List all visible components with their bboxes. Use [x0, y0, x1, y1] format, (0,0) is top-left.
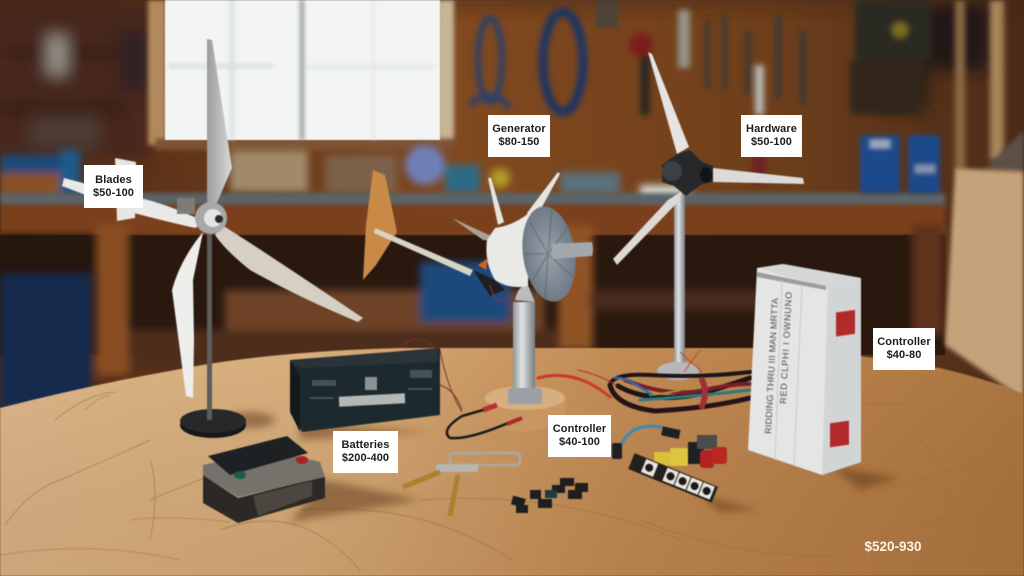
- label: controller cost, centre: [548, 415, 611, 457]
- wiring on generator: [473, 258, 505, 301]
- label: controller cost, centre: $40-100: [559, 436, 600, 448]
- metal mast: [508, 285, 542, 404]
- terminal connectors: [654, 435, 727, 468]
- hub: [177, 198, 227, 234]
- controller printed text: RIDDING THRU III MAN MRTTA: [763, 298, 780, 434]
- label: controller cost, right: $40-80: [887, 349, 921, 361]
- wood base: [485, 386, 566, 431]
- background: pegboard tools: [470, 0, 1004, 185]
- label: blades cost: Blades: [95, 174, 132, 186]
- wire bundle: [538, 370, 750, 411]
- label: batteries cost: [333, 431, 398, 473]
- blades: [62, 39, 363, 398]
- table scratches and grain: [0, 392, 1024, 570]
- label: batteries cost: Batteries: [342, 439, 389, 451]
- label: hardware cost: Hardware: [746, 123, 797, 135]
- cooling fan: [517, 203, 581, 305]
- mast and base: [657, 195, 702, 380]
- black connector pieces: [511, 478, 588, 513]
- alligator clip leads: [447, 405, 522, 438]
- pole and base: [180, 230, 246, 438]
- background: workbench and crates: [0, 135, 945, 410]
- terminal strip: [628, 453, 718, 503]
- round wooden table: [0, 348, 1024, 576]
- tail boom: [374, 228, 473, 276]
- label: hardware cost: [741, 115, 802, 157]
- label: controller cost, centre: Controller: [553, 423, 606, 435]
- centre wind turbine with tail and generator: [363, 170, 593, 431]
- blue jumper cable: [612, 426, 681, 459]
- large black battery: [290, 339, 462, 432]
- generator shaft: [552, 242, 593, 259]
- label: generator cost: [488, 115, 550, 157]
- label: blades cost: $50-100: [93, 186, 134, 198]
- label: generator cost: Generator: [492, 123, 546, 135]
- background: window: [165, 0, 440, 140]
- label: generator cost: $80-150: [498, 136, 540, 148]
- white charge controller box: [748, 264, 861, 475]
- label: controller cost, right: [873, 328, 935, 370]
- wooden tail fin: [363, 170, 397, 280]
- label: hardware cost: $50-100: [751, 136, 792, 148]
- right wind turbine: [613, 52, 804, 380]
- black hub: [662, 150, 713, 196]
- total cost: $520-930: [864, 539, 922, 554]
- left wind turbine: [62, 39, 363, 438]
- hardware: brackets and bolts: [403, 453, 520, 516]
- label: controller cost, right: Controller: [877, 336, 931, 348]
- small rear blades: [452, 172, 560, 243]
- small battery: [203, 436, 325, 523]
- controller printed text: [763, 292, 794, 434]
- label: blades cost: [84, 165, 143, 208]
- shadows on table: [225, 412, 900, 522]
- background: cardboard box at right: [945, 130, 1024, 400]
- generator housing: [486, 212, 530, 287]
- controller printed text: RED CLPHI I OWNUNO: [778, 292, 794, 404]
- blades: [613, 52, 804, 265]
- label: batteries cost: $200-400: [342, 452, 389, 464]
- table foreground wire hint: [440, 350, 462, 412]
